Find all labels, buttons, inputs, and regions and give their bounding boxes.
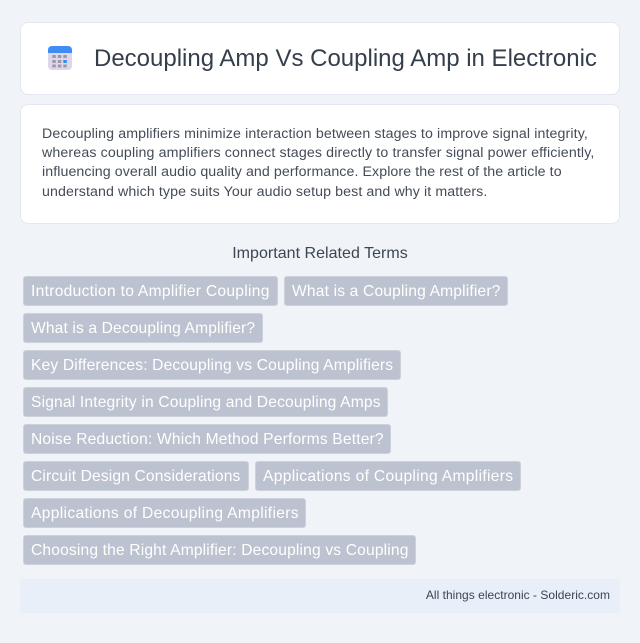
tag: Applications of Coupling Amplifiers xyxy=(263,468,513,485)
title: Decoupling Amp Vs Coupling Amp in Electronic xyxy=(94,45,597,72)
tag xyxy=(284,276,508,306)
intro paragraph: whereas coupling amplifiers connect stages directly to transfer signal power efficiently, xyxy=(42,145,594,161)
tag: Key Differences: Decoupling vs Coupling Amplifiers xyxy=(31,357,393,374)
tag: Choosing the Right Amplifier: Decoupling vs Coupling xyxy=(31,542,409,559)
tag: Signal Integrity in Coupling and Decoupling Amps xyxy=(31,394,381,411)
tag xyxy=(23,424,391,454)
tag xyxy=(23,313,263,343)
tag xyxy=(23,461,249,491)
header panel xyxy=(20,22,620,95)
intro text panel xyxy=(20,104,620,224)
intro paragraph xyxy=(42,126,594,200)
footer text: All things electronic - Solderic.com xyxy=(426,588,610,602)
tag xyxy=(255,461,521,491)
intro paragraph: Decoupling amplifiers minimize interaction between stages to improve signal integrity, xyxy=(42,126,588,142)
tag xyxy=(23,276,278,306)
intro paragraph: influencing overall audio quality and performance. Explore the rest of the article to xyxy=(42,164,562,180)
tag xyxy=(23,350,401,380)
tag: Introduction to Amplifier Coupling xyxy=(31,283,270,300)
icon: calendar xyxy=(48,46,72,70)
related terms tags xyxy=(23,276,521,565)
section heading: Important Related Terms xyxy=(232,245,408,262)
tag: Circuit Design Considerations xyxy=(31,468,240,485)
tag xyxy=(23,535,416,565)
tag: What is a Decoupling Amplifier? xyxy=(31,320,255,337)
footer bar xyxy=(20,579,620,613)
tag: Noise Reduction: Which Method Performs Better? xyxy=(31,431,384,448)
tag: Applications of Decoupling Amplifiers xyxy=(31,505,299,522)
tag: What is a Coupling Amplifier? xyxy=(292,283,501,300)
tag xyxy=(23,498,306,528)
intro paragraph: understand which type suits Your audio setup best and why it matters. xyxy=(42,184,487,200)
tag xyxy=(23,387,388,417)
